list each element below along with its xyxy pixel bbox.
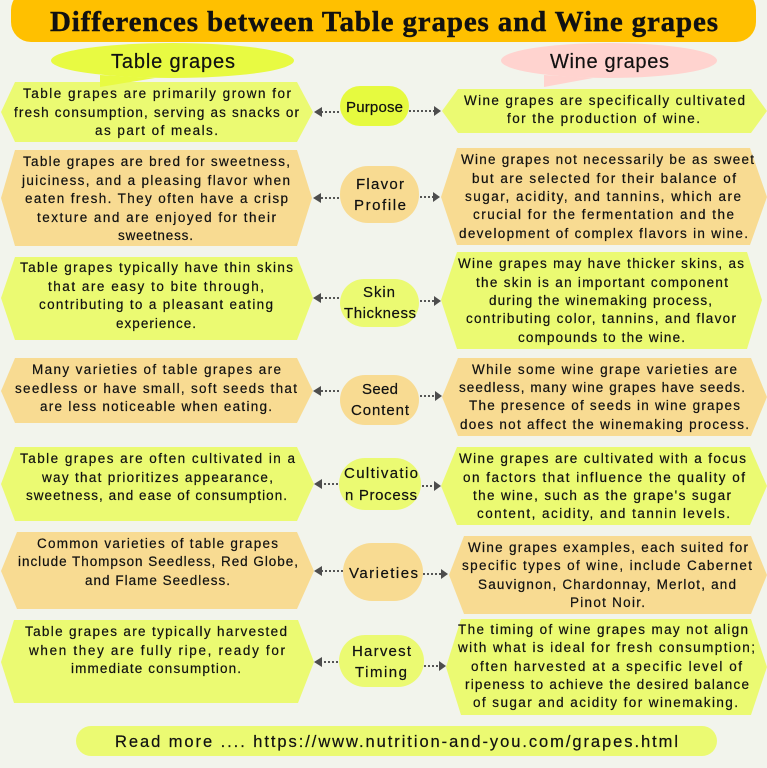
panel: table grapes purpose: Table grapes are primarily grown for xyxy=(23,86,292,101)
arrow: purpose to left xyxy=(314,107,339,117)
label: Cultivation Process xyxy=(339,458,421,510)
panel: wine grapes flavor xyxy=(441,148,767,245)
panel: wine grapes seed: does not affect the winemaking process. xyxy=(460,417,749,432)
panel: wine grapes varieties: Pinot Noir. xyxy=(570,595,645,610)
arrow: varieties to right xyxy=(423,569,448,579)
footer: read more link xyxy=(76,726,717,756)
arrow: seed to left xyxy=(313,386,339,396)
panel: table grapes skin: Table grapes typically have thin skins xyxy=(20,260,293,275)
panel: wine grapes skin: compounds to the wine. xyxy=(518,330,685,345)
panel: table grapes seed: are less noticeable when eating. xyxy=(40,399,272,414)
panel: table grapes varieties xyxy=(1,532,314,609)
panel: table grapes purpose: as part of meals. xyxy=(95,123,218,138)
label: Harvest Timing xyxy=(339,635,424,687)
label: Cultivation Process: Cultivatio xyxy=(344,465,418,482)
row: Skin Thickness xyxy=(1,252,762,349)
panel: table grapes harvest: Table grapes are typically harvested xyxy=(25,624,287,639)
arrow: flavor to left xyxy=(313,193,339,203)
panel: table grapes flavor: sweetness. xyxy=(118,228,193,243)
panel: table grapes seed: Many varieties of table grapes are xyxy=(32,362,281,377)
label: Skin Thickness: Thickness xyxy=(344,305,416,322)
panel: table grapes cultivation xyxy=(1,447,314,521)
heading: Table grapes: Table grapes xyxy=(111,51,235,73)
panel: table grapes cultivation: Table grapes are often cultivated in a xyxy=(20,451,295,466)
label: Seed Content: Seed xyxy=(362,381,398,398)
arrow: harvest to left xyxy=(314,657,338,667)
panel: table grapes flavor: juiciness, and a pleasing flavor when xyxy=(21,173,290,188)
row: Varieties xyxy=(1,532,767,614)
row: Purpose xyxy=(1,82,767,142)
panel: wine grapes skin: Wine grapes may have thicker skins, as xyxy=(458,256,744,271)
label: Varieties: Varieties xyxy=(349,565,418,582)
arrow: varieties to left xyxy=(314,566,343,576)
panel: table grapes flavor xyxy=(1,150,312,246)
panel: wine grapes purpose xyxy=(442,89,767,133)
panel: wine grapes flavor: development of complex flavors in wine. xyxy=(459,226,748,241)
panel: wine grapes cultivation xyxy=(441,447,767,525)
panel: table grapes skin: contributing to a pleasant eating xyxy=(39,297,273,312)
panel: wine grapes varieties xyxy=(449,536,767,614)
panel: table grapes skin: experience. xyxy=(116,316,196,331)
label: Skin Thickness: Skin xyxy=(363,284,395,301)
panel: wine grapes flavor: sugar, acidity, and tannins, which are xyxy=(465,189,741,204)
arrow: harvest to right xyxy=(424,661,446,671)
row: Seed Content xyxy=(1,358,767,436)
title xyxy=(11,0,756,42)
label: Skin Thickness xyxy=(340,279,419,327)
panel: wine grapes seed: seedless, many wine grapes have seeds. xyxy=(459,380,745,395)
arrow: flavor to right xyxy=(420,192,440,202)
panel: wine grapes cultivation: content, acidity, and tannin levels. xyxy=(477,506,730,521)
label: Seed Content: Content xyxy=(351,402,410,419)
panel: wine grapes skin: during the winemaking process, xyxy=(489,293,712,308)
panel: wine grapes flavor: crucial for the fermentation and the xyxy=(473,207,734,222)
arrow: cultivation to left xyxy=(314,479,338,489)
panel: wine grapes harvest: with what is ideal for fresh consumption; xyxy=(457,640,755,655)
panel: wine grapes flavor: but are selected for their balance of xyxy=(472,171,736,186)
panel: wine grapes seed: The presence of seeds in wine grapes xyxy=(469,398,740,413)
label: Cultivation Process: n Process xyxy=(345,487,417,504)
panel: wine grapes cultivation: Wine grapes are cultivated with a focus xyxy=(459,451,746,466)
panel: table grapes flavor: texture and are enjoyed for their xyxy=(37,210,276,225)
panel: wine grapes purpose: for the production of wine. xyxy=(507,111,700,126)
panel: wine grapes harvest: of sugar and acidity for winemaking. xyxy=(473,695,738,710)
heading: Table grapes xyxy=(51,43,294,87)
panel: table grapes flavor: eaten fresh. They often have a crisp xyxy=(25,191,288,206)
panel: wine grapes varieties: specific types of wine, include Cabernet xyxy=(462,558,752,573)
panel: wine grapes harvest: often harvested at a specific level of xyxy=(471,659,742,674)
panel: wine grapes seed: While some wine grape varieties are xyxy=(472,362,737,377)
panel: wine grapes skin xyxy=(441,252,762,349)
label: Varieties xyxy=(343,543,423,601)
panel: table grapes skin xyxy=(1,257,313,340)
panel: table grapes seed xyxy=(1,358,313,423)
arrow: seed to right xyxy=(420,391,442,401)
panel: table grapes seed: seedless or have small, soft seeds that xyxy=(15,381,297,396)
title: Differences between Table grapes and Wine grapes xyxy=(50,6,718,38)
label: Flavor Profile: Profile xyxy=(354,197,406,214)
label: Flavor Profile xyxy=(340,166,419,223)
label: Harvest Timing: Harvest xyxy=(352,643,412,660)
panel: table grapes harvest xyxy=(1,620,314,703)
label: Purpose xyxy=(340,86,409,126)
panel: table grapes cultivation: sweetness, and ease of consumption. xyxy=(26,488,287,503)
panel: wine grapes skin: the skin is an important component xyxy=(476,275,728,290)
panel: wine grapes cultivation: the wine, such as the grape's sugar xyxy=(473,488,732,503)
panel: wine grapes varieties: Wine grapes examples, each suited for xyxy=(468,540,748,555)
arrow: cultivation to right xyxy=(422,481,441,491)
label: Harvest Timing: Timing xyxy=(355,664,407,681)
label: Flavor Profile: Flavor xyxy=(356,176,404,193)
panel: wine grapes skin: contributing color, tannins, and flavor xyxy=(466,311,736,326)
heading: Wine grapes: Wine grapes xyxy=(550,51,669,73)
row: Cultivation Process xyxy=(1,447,767,525)
panel: table grapes varieties: and Flame Seedless. xyxy=(85,573,230,588)
arrow: skin to left xyxy=(313,293,339,303)
panel: table grapes cultivation: way that prioritizes appearance, xyxy=(41,470,273,485)
label: Purpose: Purpose xyxy=(346,99,403,116)
panel: table grapes varieties: Common varieties of table grapes xyxy=(37,536,278,551)
panel: table grapes flavor: Table grapes are bred for sweetness, xyxy=(23,154,290,169)
arrow: purpose to right xyxy=(409,106,441,116)
panel: wine grapes harvest xyxy=(446,619,767,715)
panel: table grapes purpose: fresh consumption, serving as snacks or xyxy=(14,105,300,120)
panel: wine grapes harvest: The timing of wine grapes may not align xyxy=(458,622,748,637)
panel: table grapes varieties: include Thompson Seedless, Red Globe, xyxy=(18,554,298,569)
panel: wine grapes seed xyxy=(442,358,767,436)
panel: table grapes purpose xyxy=(1,82,313,142)
panel: table grapes harvest: when they are fully ripe, ready for xyxy=(28,643,286,658)
label: Seed Content xyxy=(340,375,419,425)
row: Flavor Profile xyxy=(1,148,767,246)
panel: wine grapes harvest: ripeness to achieve the desired balance xyxy=(465,677,749,692)
panel: wine grapes varieties: Sauvignon, Chardonnay, Merlot, and xyxy=(478,577,736,592)
row: Harvest Timing xyxy=(1,619,767,715)
panel: table grapes harvest: immediate consumption. xyxy=(71,661,241,676)
footer: read more link: Read more .... https://www.nutrition-and-you.com/grapes.html xyxy=(115,733,678,751)
arrow: skin to right xyxy=(420,296,441,306)
panel: wine grapes flavor: Wine grapes not necessarily be as sweet xyxy=(461,152,754,167)
panel: table grapes skin: that are easy to bite through, xyxy=(48,279,264,294)
panel: wine grapes cultivation: on factors that influence the quality of xyxy=(463,470,745,485)
panel: wine grapes purpose: Wine grapes are specifically cultivated xyxy=(464,93,745,108)
heading: Wine grapes xyxy=(501,43,717,87)
